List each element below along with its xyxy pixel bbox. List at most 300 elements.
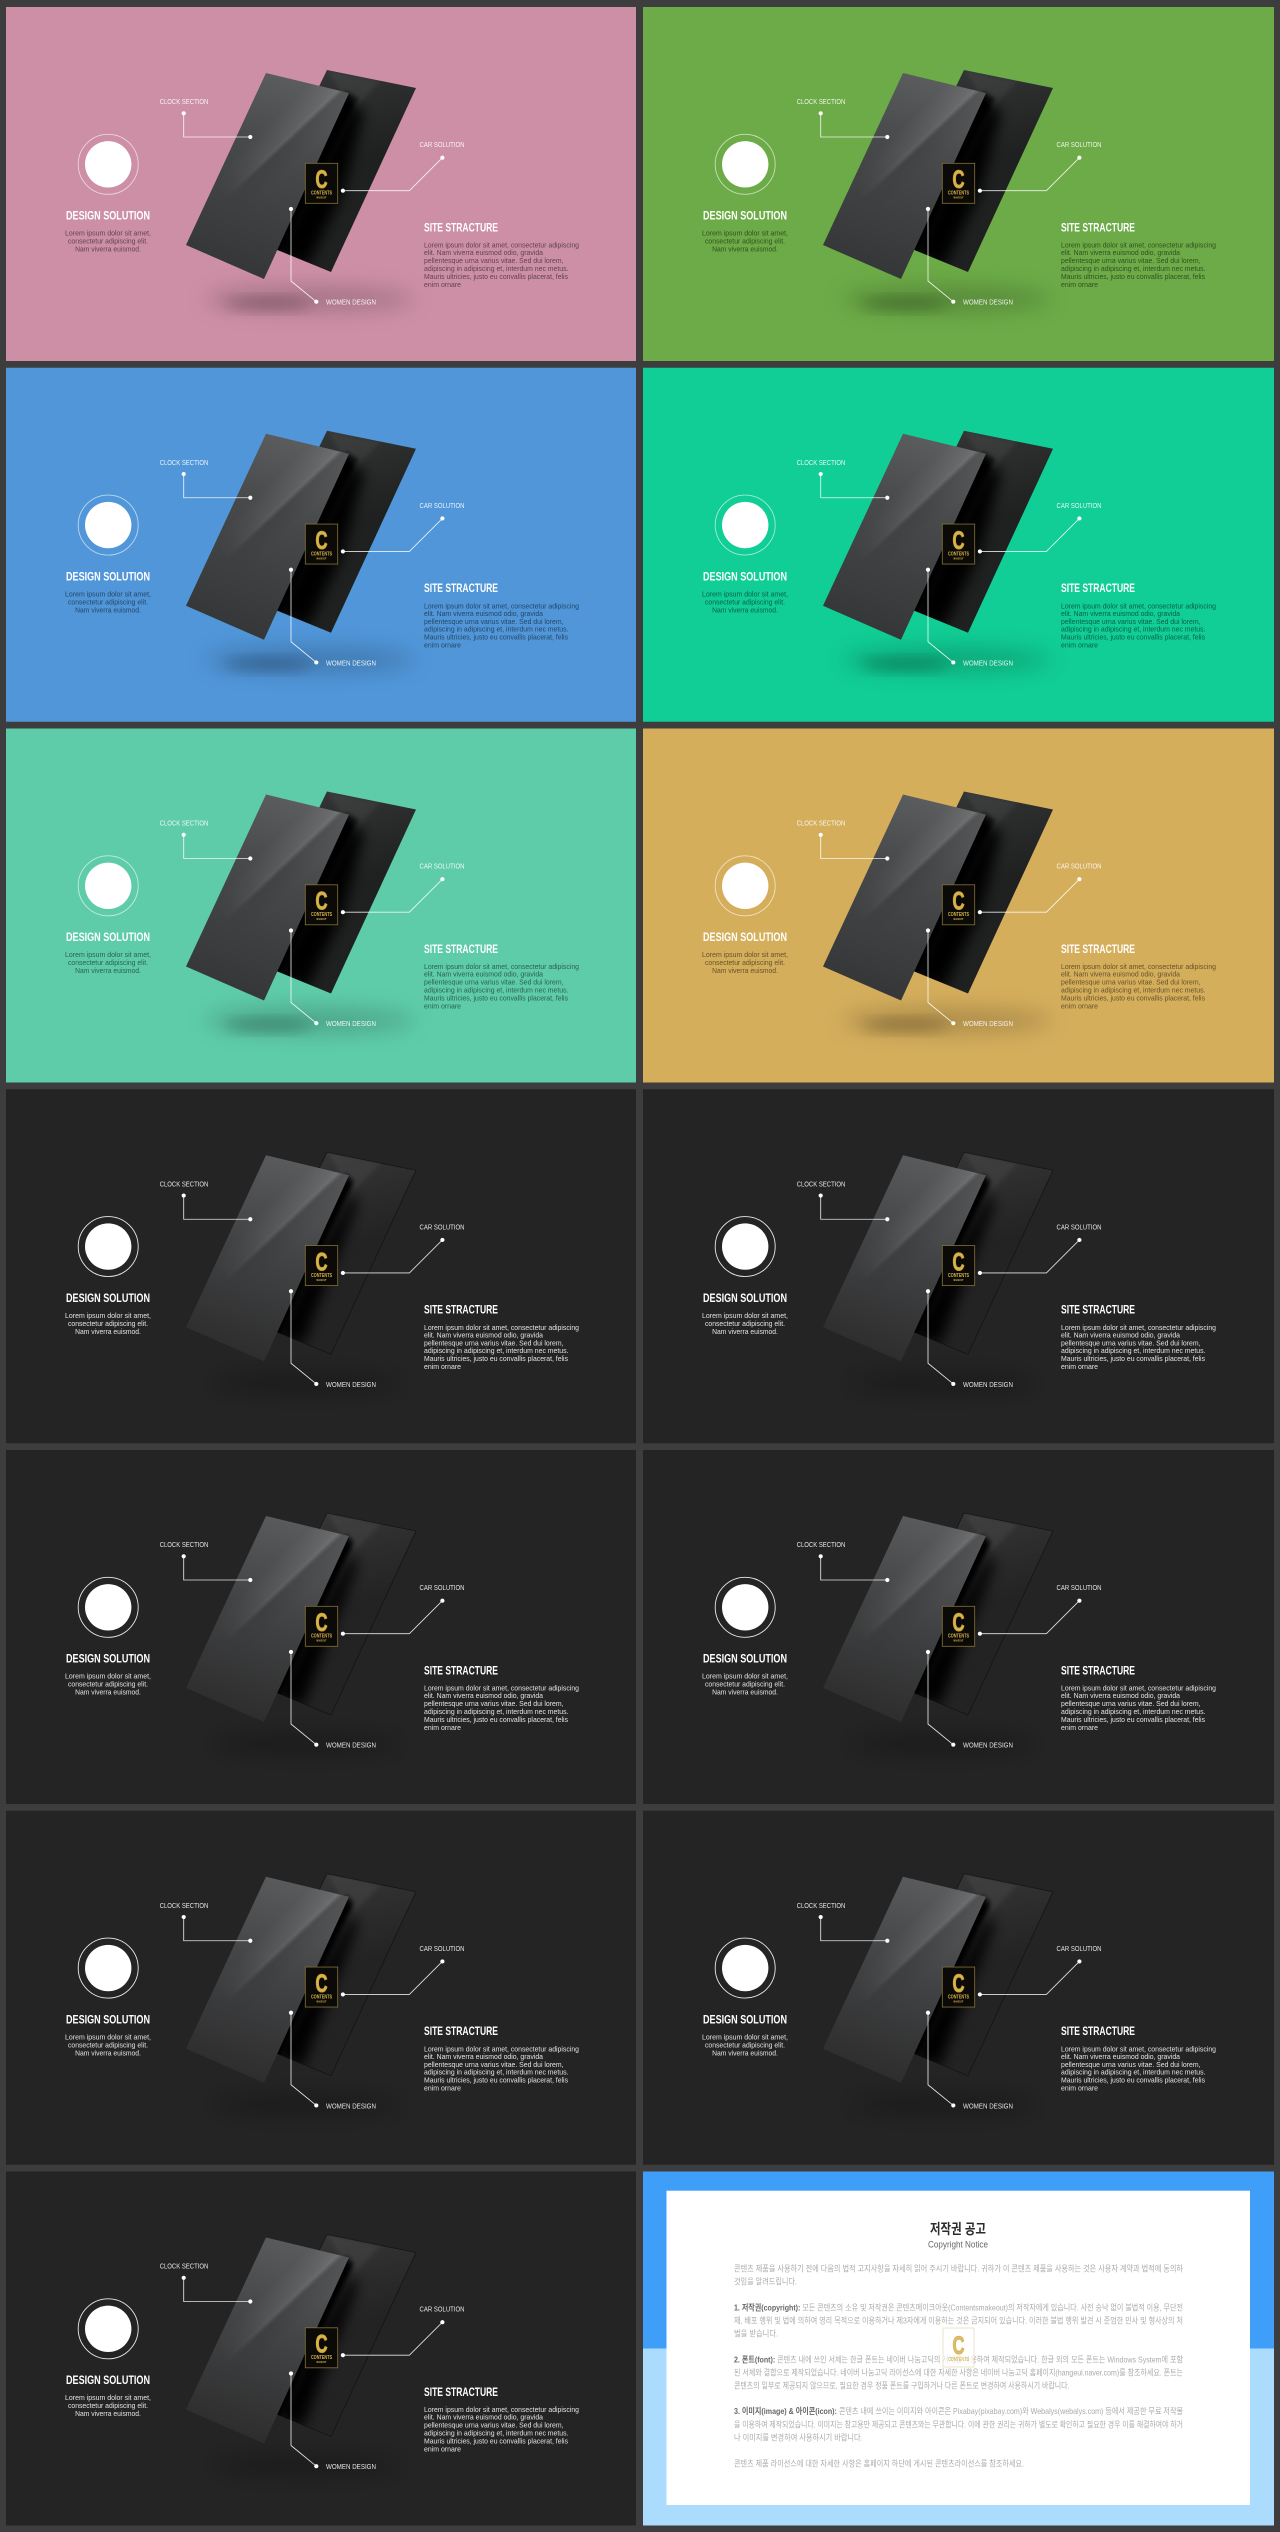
logo badge: MAKEOUT	[316, 196, 327, 200]
callout: clock section: CLOCK SECTION	[160, 2262, 208, 2270]
callout: car solution: CAR SOLUTION	[1056, 501, 1102, 510]
panel: teal slide	[643, 368, 1274, 722]
text block: site stracture: enim ornare	[424, 1723, 461, 1732]
text block: design solution	[65, 571, 151, 614]
panel: blue slide	[6, 368, 636, 722]
text block: site stracture: Mauris ultricies, justo eu convallis placerat, felis	[1061, 993, 1205, 1002]
callout: clock section: CLOCK SECTION	[797, 97, 845, 106]
text block: site stracture: enim ornare	[1061, 280, 1098, 289]
logo badge: C	[952, 527, 964, 555]
text block: site stracture: elit. Nam viverra euismod odio, gravida	[1061, 1330, 1180, 1339]
logo badge	[305, 1246, 338, 1286]
text block: design solution: consectetur adipiscing elit.	[68, 958, 148, 967]
text block: design solution: Nam viverra euismod.	[712, 605, 778, 614]
callout: clock section	[797, 458, 889, 500]
callout: clock section: CLOCK SECTION	[160, 1179, 208, 1188]
logo badge: CONTENTS	[948, 1634, 970, 1640]
panel: dark slide 3	[6, 1450, 636, 1804]
callout: women design	[926, 568, 1013, 667]
callout: car solution: CAR SOLUTION	[1056, 1222, 1102, 1231]
text block: design solution: consectetur adipiscing elit.	[68, 2401, 148, 2410]
text block: site stracture	[1061, 1665, 1216, 1732]
text block: font	[734, 2354, 1183, 2390]
logo badge: CONTENTS	[311, 1994, 333, 2000]
text block: site stracture: elit. Nam viverra euismod odio, gravida	[1061, 248, 1180, 257]
callout: car solution: CAR SOLUTION	[1056, 1583, 1102, 1592]
callout: car solution: CAR SOLUTION	[420, 2304, 464, 2314]
text block: image and icon	[734, 2406, 1183, 2442]
callout: women design: WOMEN DESIGN	[963, 1740, 1013, 1750]
text block: site stracture: Mauris ultricies, justo eu convallis placerat, felis	[424, 2436, 568, 2445]
text block: site stracture: pellentesque urna varius vitae. Sed dui lorem,	[1061, 1338, 1200, 1347]
panel: dark slide 6	[643, 1811, 1274, 2165]
text block: intro	[734, 2264, 1183, 2287]
text block: site stracture: pellentesque urna varius vitae. Sed dui lorem,	[1061, 256, 1200, 265]
text block: font: 콘텐츠의 일부로 제공되지 않으므로, 필요한 경우 정품 폰트를 구입하거나 다른 폰트로 변경하여 사용하시기 바랍니다.	[734, 2380, 1070, 2390]
callout: car solution: CAR SOLUTION	[420, 1583, 464, 1592]
text block: design solution	[702, 211, 788, 254]
text block: design solution: consectetur adipiscing elit.	[705, 2040, 785, 2049]
text block: site stracture: Mauris ultricies, justo eu convallis placerat, felis	[1061, 2076, 1205, 2085]
text block: site stracture: SITE STRACTURE	[1061, 1305, 1135, 1317]
panel: dark slide 4	[643, 1450, 1274, 1804]
text block: site stracture	[424, 2026, 579, 2093]
callout: women design: WOMEN DESIGN	[326, 1019, 376, 1028]
text block: design solution: Nam viverra euismod.	[712, 244, 778, 254]
panel: dark slide 5	[6, 1811, 636, 2165]
text block: design solution: DESIGN SOLUTION	[66, 1654, 150, 1666]
logo badge: MAKEOUT	[316, 1638, 327, 1642]
text block: site stracture: adipiscing in adipiscing et, interdum nec metus.	[1061, 264, 1206, 273]
text block: image and icon: 나 이미지를 변경하여 사용하시기 바랍니다.	[734, 2432, 863, 2442]
text block: design solution: DESIGN SOLUTION	[66, 211, 150, 223]
callout: car solution	[341, 1222, 464, 1275]
text block: design solution: DESIGN SOLUTION	[703, 932, 787, 944]
callout: car solution: CAR SOLUTION	[1056, 140, 1102, 149]
text block: site stracture: elit. Nam viverra euismod odio, gravida	[1061, 1691, 1180, 1700]
callout: car solution	[978, 1222, 1102, 1275]
text block: site stracture: SITE STRACTURE	[1061, 944, 1135, 956]
text block: design solution	[65, 932, 151, 975]
logo badge: CONTENTS	[311, 912, 333, 918]
icon: white circle with ring	[715, 1577, 775, 1637]
logo badge: C	[316, 888, 328, 916]
callout: clock section	[797, 1901, 889, 1943]
panel: dark slide 2	[643, 1089, 1274, 1443]
text block: design solution	[702, 1654, 788, 1696]
text block: design solution: Lorem ipsum dolor sit amet,	[65, 950, 151, 959]
callout: women design: WOMEN DESIGN	[963, 658, 1013, 667]
callout: women design: WOMEN DESIGN	[963, 1019, 1013, 1028]
callout: women design	[289, 2371, 376, 2471]
callout: women design: WOMEN DESIGN	[326, 1380, 376, 1389]
text block: site stracture: elit. Nam viverra euismod odio, gravida	[1061, 2052, 1180, 2061]
panel: pink slide	[6, 7, 636, 361]
logo badge	[305, 524, 338, 564]
logo badge	[942, 1246, 975, 1286]
logo badge	[305, 1606, 338, 1646]
callout: car solution	[978, 501, 1102, 554]
text block: site stracture: SITE STRACTURE	[1061, 222, 1135, 234]
text block: site stracture: enim ornare	[1061, 1362, 1098, 1371]
logo badge	[942, 1967, 975, 2007]
text block: site stracture: Mauris ultricies, justo eu convallis placerat, felis	[1061, 633, 1205, 642]
white notice card	[666, 2191, 1250, 2505]
callout: women design	[289, 1650, 376, 1750]
logo badge	[942, 163, 975, 203]
card mockups with shadow	[176, 1871, 416, 2115]
text block: site stracture	[1061, 583, 1216, 650]
callout: clock section: CLOCK SECTION	[797, 1179, 845, 1188]
panel background	[6, 1450, 636, 1804]
panel background	[643, 368, 1274, 722]
text block: design solution: Nam viverra euismod.	[712, 1327, 778, 1336]
callout: clock section	[160, 2262, 252, 2304]
logo badge	[305, 2328, 338, 2368]
callout: car solution: CAR SOLUTION	[1056, 1944, 1102, 1953]
logo badge: C	[316, 1970, 328, 1998]
text block: design solution: DESIGN SOLUTION	[66, 2014, 150, 2026]
text block: design solution	[65, 211, 151, 254]
text block: site stracture: SITE STRACTURE	[424, 2026, 498, 2038]
text block: image and icon: 을 이용하여 제작되었습니다. 이미지는 참고용만 제공되고 콘텐츠와는 무관합니다. 이에 관한 권리는 귀하가 별도로 확인하고 필요한 경우 이를 해결하여야 하거	[734, 2419, 1183, 2429]
text block: site stracture: elit. Nam viverra euismod odio, gravida	[424, 609, 543, 618]
callout: women design	[289, 2011, 376, 2110]
callout: women design: WOMEN DESIGN	[963, 298, 1013, 306]
text block: site stracture: SITE STRACTURE	[424, 944, 498, 956]
logo watermark: C	[952, 2332, 964, 2360]
text block: site stracture: Mauris ultricies, justo eu convallis placerat, felis	[424, 993, 568, 1002]
panel background	[6, 728, 636, 1082]
text block: site stracture: pellentesque urna varius vitae. Sed dui lorem,	[424, 1338, 564, 1347]
text block: design solution: Lorem ipsum dolor sit amet,	[65, 589, 151, 598]
text block: design solution: Nam viverra euismod.	[75, 2409, 141, 2418]
text block: design solution: DESIGN SOLUTION	[66, 932, 150, 944]
text block: site stracture	[1061, 2026, 1216, 2093]
text block: site stracture: Mauris ultricies, justo eu convallis placerat, felis	[424, 1715, 568, 1724]
callout: clock section: CLOCK SECTION	[160, 818, 208, 828]
text block: site stracture: Lorem ipsum dolor sit amet, consectetur adipiscing	[424, 2044, 579, 2053]
text block: site stracture: Lorem ipsum dolor sit amet, consectetur adipiscing	[424, 1684, 579, 1692]
card mockups with shadow	[176, 1149, 416, 1393]
icon: white circle with ring	[715, 1217, 775, 1277]
callout: women design	[289, 568, 376, 667]
text block: site stracture: SITE STRACTURE	[1061, 1665, 1135, 1677]
icon: white circle with ring	[78, 1938, 138, 1998]
text block: design solution: Nam viverra euismod.	[712, 966, 778, 975]
text block: site stracture	[424, 1665, 579, 1732]
text block: design solution: Nam viverra euismod.	[75, 1688, 141, 1696]
logo badge: CONTENTS	[948, 551, 970, 557]
text block: site stracture: Mauris ultricies, justo eu convallis placerat, felis	[424, 2076, 568, 2085]
card mockups with shadow	[813, 788, 1053, 1032]
callout: car solution: CAR SOLUTION	[1056, 862, 1102, 870]
callout: clock section: CLOCK SECTION	[160, 1540, 208, 1549]
logo badge: CONTENTS	[948, 912, 970, 918]
text block: site stracture: enim ornare	[424, 1001, 461, 1010]
icon: white circle with ring	[78, 1577, 138, 1637]
light blue background bottom	[643, 2348, 1274, 2526]
logo badge: CONTENTS	[311, 551, 333, 557]
text block: site stracture	[424, 222, 579, 289]
text block: site stracture: Lorem ipsum dolor sit amet, consectetur adipiscing	[1061, 1323, 1216, 1332]
text block: site stracture: pellentesque urna varius vitae. Sed dui lorem,	[424, 978, 564, 987]
callout: clock section	[160, 818, 252, 861]
logo badge: C	[316, 1609, 328, 1637]
text block: site stracture: elit. Nam viverra euismod odio, gravida	[1061, 970, 1180, 979]
text block: site stracture: Mauris ultricies, justo eu convallis placerat, felis	[424, 1354, 568, 1363]
card mockups with shadow	[813, 428, 1053, 672]
callout: clock section	[160, 97, 252, 139]
callout: women design: WOMEN DESIGN	[326, 1740, 376, 1750]
panel: mint slide	[6, 728, 636, 1082]
text block: site stracture: adipiscing in adipiscing et, interdum nec metus.	[1061, 1346, 1206, 1355]
text block: design solution: Lorem ipsum dolor sit amet,	[65, 2032, 151, 2041]
text block: design solution: Nam viverra euismod.	[75, 2048, 141, 2057]
logo badge: CONTENTS	[311, 1273, 333, 1279]
callout: clock section	[797, 97, 889, 139]
text block: site stracture: Mauris ultricies, justo eu convallis placerat, felis	[1061, 1354, 1205, 1363]
text block: site stracture: adipiscing in adipiscing et, interdum nec metus.	[424, 264, 568, 273]
callout: women design	[289, 207, 376, 306]
text block: site stracture: SITE STRACTURE	[424, 583, 498, 595]
card mockups with shadow	[813, 1149, 1053, 1393]
text block: site stracture: adipiscing in adipiscing et, interdum nec metus.	[1061, 985, 1206, 994]
card mockups with shadow	[176, 67, 416, 311]
logo badge: CONTENTS	[311, 190, 333, 196]
text block: site stracture: adipiscing in adipiscing et, interdum nec metus.	[424, 2068, 568, 2077]
logo badge: C	[316, 1248, 328, 1276]
logo badge	[942, 524, 975, 564]
callout: car solution	[978, 140, 1102, 193]
panel: green slide	[643, 7, 1274, 361]
panel background	[643, 1450, 1274, 1804]
callout: women design: WOMEN DESIGN	[963, 1380, 1013, 1389]
text block: font: 2. 폰트(font): 콘텐츠 내에 쓰인 서체는 한글 폰트는 네이버 나눔고딕의 서체를 사용하여 제작되었습니다. 한글 외의 모든 폰트는 Windows System에 포함	[734, 2354, 1183, 2364]
panel: dark slide 7	[6, 2172, 636, 2526]
text block: design solution	[65, 2375, 151, 2418]
text block: copyright	[734, 2302, 1183, 2338]
callout: car solution: CAR SOLUTION	[420, 862, 464, 870]
logo badge: C	[952, 1970, 964, 1998]
card mockups with shadow	[813, 67, 1053, 311]
panel background	[6, 368, 636, 722]
text block: design solution	[65, 1293, 151, 1336]
callout: car solution	[341, 1583, 464, 1636]
logo badge	[305, 1967, 338, 2007]
callout: clock section: CLOCK SECTION	[797, 458, 845, 467]
text block: design solution: Nam viverra euismod.	[75, 966, 141, 975]
text block: site stracture: SITE STRACTURE	[424, 1305, 498, 1317]
text block: site stracture	[1061, 222, 1216, 289]
text block: site stracture: SITE STRACTURE	[1061, 583, 1135, 595]
text block: design solution: consectetur adipiscing elit.	[705, 236, 785, 246]
text block: site stracture: elit. Nam viverra euismod odio, gravida	[424, 1330, 543, 1339]
logo badge: CONTENTS	[948, 1994, 970, 2000]
text block: site stracture: elit. Nam viverra euismod odio, gravida	[1061, 609, 1180, 618]
text block: site stracture: elit. Nam viverra euismod odio, gravida	[424, 2413, 543, 2422]
heading: copyright notice: Copyright Notice	[928, 2240, 988, 2250]
text block: site stracture: pellentesque urna varius vitae. Sed dui lorem,	[424, 617, 564, 626]
text block: site stracture: pellentesque urna varius vitae. Sed dui lorem,	[1061, 978, 1200, 987]
logo badge: MAKEOUT	[954, 1999, 964, 2003]
callout: clock section	[797, 1540, 889, 1582]
logo badge: CONTENTS	[311, 2355, 333, 2361]
text block: design solution: Lorem ipsum dolor sit amet,	[65, 1311, 151, 1320]
text block: site stracture	[424, 944, 579, 1010]
callout: women design: WOMEN DESIGN	[326, 2101, 376, 2110]
logo badge: MAKEOUT	[316, 1278, 327, 1282]
panel background	[6, 7, 636, 361]
text block: site stracture: adipiscing in adipiscing et, interdum nec metus.	[424, 1346, 568, 1355]
text block: site stracture: adipiscing in adipiscing et, interdum nec metus.	[424, 985, 568, 994]
text block: site stracture: Lorem ipsum dolor sit amet, consectetur adipiscing	[424, 601, 579, 610]
text block: design solution	[702, 571, 788, 614]
text block: site stracture: Lorem ipsum dolor sit amet, consectetur adipiscing	[424, 962, 579, 971]
text block: design solution: Lorem ipsum dolor sit amet,	[702, 228, 788, 238]
text block: license note: 콘텐츠 제품 라이선스에 대한 자세한 사항은 홈페이지 하단에 게시된 콘텐츠라이선스를 참조하세요.	[734, 2458, 1024, 2468]
callout: car solution: CAR SOLUTION	[420, 1944, 464, 1953]
text block: intro: 것임을 알려드립니다.	[734, 2277, 797, 2287]
text block: site stracture: pellentesque urna varius vitae. Sed dui lorem,	[1061, 617, 1200, 626]
text block: site stracture: Lorem ipsum dolor sit amet, consectetur adipiscing	[424, 240, 579, 250]
text block: design solution	[702, 2014, 788, 2057]
text block: design solution	[702, 932, 788, 975]
logo badge: MAKEOUT	[954, 1638, 964, 1642]
callout: women design	[926, 1650, 1013, 1750]
text block: design solution: DESIGN SOLUTION	[703, 1293, 787, 1305]
callout: car solution	[978, 1583, 1102, 1636]
card mockups with shadow	[176, 1510, 416, 1754]
text block: design solution: Lorem ipsum dolor sit amet,	[702, 589, 788, 598]
logo badge	[942, 885, 975, 925]
text block: site stracture: enim ornare	[424, 2084, 461, 2093]
panel background	[643, 728, 1274, 1082]
panel background	[643, 1089, 1274, 1443]
text block: site stracture	[1061, 944, 1216, 1010]
panel: gold slide	[643, 728, 1274, 1082]
callout: clock section	[160, 1901, 252, 1943]
text block: image and icon: 3. 이미지(image) & 아이콘(icon): 콘텐츠 내에 쓰이는 이미지와 아이콘은 Pixabay(pixabay.com)와 Webalys(webalys.com) 등에서 제공한 무료 저작물	[734, 2406, 1183, 2416]
text block: site stracture: enim ornare	[1061, 2084, 1098, 2093]
text block: design solution: Nam viverra euismod.	[712, 2048, 778, 2057]
text block: site stracture: pellentesque urna varius vitae. Sed dui lorem,	[424, 2060, 564, 2069]
logo badge: CONTENTS	[948, 190, 970, 196]
callout: car solution	[341, 1944, 464, 1997]
callout: car solution	[341, 501, 464, 554]
text block: design solution: Nam viverra euismod.	[75, 605, 141, 614]
text block: design solution: Lorem ipsum dolor sit amet,	[702, 2032, 788, 2041]
card mockups with shadow	[813, 1510, 1053, 1754]
text block: site stracture	[424, 2387, 579, 2453]
text block: site stracture: enim ornare	[1061, 1001, 1098, 1010]
card mockups with shadow	[176, 2232, 416, 2476]
icon: white circle with ring	[715, 134, 775, 194]
panel background	[6, 2172, 636, 2526]
text block: site stracture: Lorem ipsum dolor sit amet, consectetur adipiscing	[424, 2405, 579, 2414]
text block: design solution	[702, 1293, 788, 1336]
text block: site stracture: elit. Nam viverra euismod odio, gravida	[424, 1691, 543, 1700]
callout: women design: WOMEN DESIGN	[963, 2101, 1013, 2110]
text block: site stracture: SITE STRACTURE	[1061, 2026, 1135, 2038]
text block: site stracture	[424, 1305, 579, 1371]
text block: site stracture: SITE STRACTURE	[424, 2387, 498, 2399]
callout: car solution: CAR SOLUTION	[420, 1222, 464, 1231]
text block: design solution: DESIGN SOLUTION	[66, 1293, 150, 1305]
icon: white circle with ring	[715, 1938, 775, 1998]
callout: car solution	[978, 1944, 1102, 1997]
text block: site stracture: SITE STRACTURE	[424, 1665, 498, 1677]
logo badge: MAKEOUT	[316, 917, 327, 921]
text block: site stracture: Mauris ultricies, justo eu convallis placerat, felis	[1061, 272, 1205, 281]
logo badge	[942, 1606, 975, 1646]
callout: clock section: CLOCK SECTION	[797, 818, 845, 828]
callout: clock section	[797, 1179, 889, 1221]
text block: design solution: DESIGN SOLUTION	[703, 211, 787, 223]
panel background	[643, 1811, 1274, 2165]
callout: clock section: CLOCK SECTION	[160, 97, 208, 106]
logo badge: C	[952, 888, 964, 916]
callout: clock section	[160, 1540, 252, 1582]
text block: copyright: 1. 저작권(copyright): 모든 콘텐츠의 소유 및 저작권은 콘텐츠메이크아웃(Contentsmakeout)의 저작자에게 있습니다. 사전 승낙 없이 불법적 이용, 무단전	[734, 2302, 1183, 2312]
callout: car solution	[341, 140, 464, 193]
text block: site stracture	[424, 583, 579, 650]
icon: white circle with ring	[715, 495, 775, 555]
text block: site stracture: elit. Nam viverra euismod odio, gravida	[424, 248, 543, 257]
callout: car solution	[341, 862, 464, 914]
text block: design solution: Lorem ipsum dolor sit amet,	[65, 2393, 151, 2402]
text block: site stracture: pellentesque urna varius vitae. Sed dui lorem,	[1061, 1699, 1200, 1708]
text block: design solution: Nam viverra euismod.	[75, 1327, 141, 1336]
text block: design solution: DESIGN SOLUTION	[66, 2375, 150, 2387]
icon: white circle with ring	[78, 495, 138, 555]
text block: design solution: DESIGN SOLUTION	[703, 1654, 787, 1666]
logo badge: MAKEOUT	[954, 1278, 964, 1282]
text block: design solution: consectetur adipiscing elit.	[705, 597, 785, 606]
text block: site stracture: adipiscing in adipiscing et, interdum nec metus.	[1061, 2068, 1206, 2077]
text block: site stracture: adipiscing in adipiscing et, interdum nec metus.	[424, 625, 568, 634]
logo badge: C	[952, 1609, 964, 1637]
icon: white circle with ring	[78, 856, 138, 916]
text block: design solution: Lorem ipsum dolor sit amet,	[702, 1311, 788, 1320]
panel: dark slide 1	[6, 1089, 636, 1443]
text block: font: 된 서체와 결합으로 제작되었습니다. 네이버 나눔고딕 라이선스에 대한 자세한 사항은 네이버 나눔고딕 홈페이지(hangeul.naver.com)를 참조하세요. 폰트는	[734, 2367, 1183, 2377]
text block: design solution: Nam viverra euismod.	[75, 244, 141, 254]
card mockups with shadow	[813, 1871, 1053, 2115]
text block: site stracture: Lorem ipsum dolor sit amet, consectetur adipiscing	[1061, 240, 1216, 250]
text block: copyright: 벌을 받습니다.	[734, 2328, 778, 2338]
text block: site stracture: pellentesque urna varius vitae. Sed dui lorem,	[424, 2421, 564, 2430]
text block: design solution: DESIGN SOLUTION	[703, 571, 787, 583]
text block: copyright: 재, 배포 행위 및 법에 의하여 영리 목적으로 이용하거나 제3자에게 이용하는 것은 금지되어 있습니다. 이러한 불법 행위 발견 시 준엄한 민사 및 형사상의 처	[734, 2315, 1183, 2325]
text block: site stracture: enim ornare	[424, 1362, 461, 1371]
callout: women design: WOMEN DESIGN	[326, 658, 376, 667]
panel background	[643, 7, 1274, 361]
text block: design solution: DESIGN SOLUTION	[703, 2014, 787, 2026]
logo badge: C	[316, 166, 328, 194]
icon: white circle with ring	[715, 856, 775, 916]
text block: site stracture: Lorem ipsum dolor sit amet, consectetur adipiscing	[1061, 601, 1216, 610]
text block: design solution	[65, 2014, 151, 2057]
callout: women design: WOMEN DESIGN	[326, 298, 376, 306]
icon: white circle with ring	[78, 1217, 138, 1277]
text block: design solution: Lorem ipsum dolor sit amet,	[65, 228, 151, 238]
panel background	[6, 1811, 636, 2165]
callout: clock section: CLOCK SECTION	[160, 458, 208, 467]
callout: women design	[926, 207, 1013, 306]
text block: site stracture: enim ornare	[1061, 1723, 1098, 1732]
text block: site stracture: Lorem ipsum dolor sit amet, consectetur adipiscing	[1061, 2044, 1216, 2053]
